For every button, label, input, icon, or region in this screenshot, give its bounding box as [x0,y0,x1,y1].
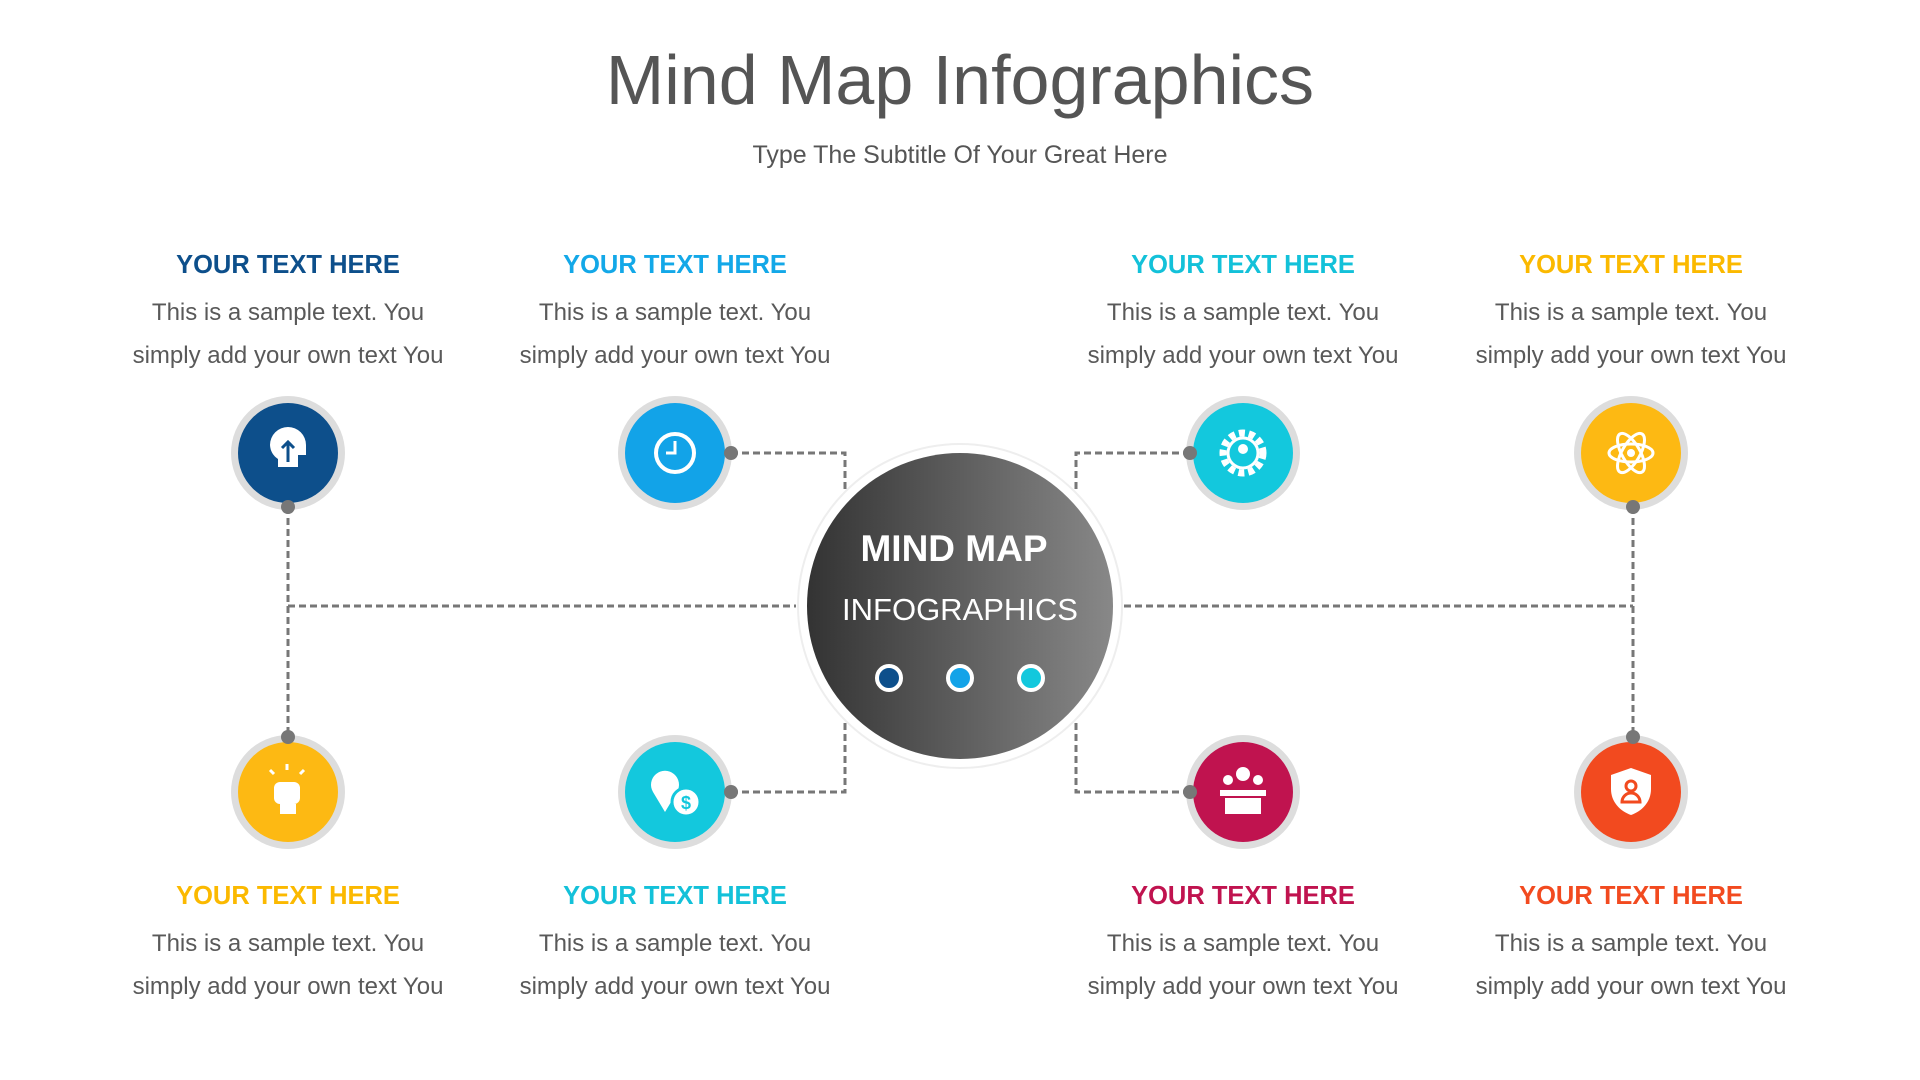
icon: gear [1186,396,1300,510]
text: top 2: This is a sample text. You [539,299,811,326]
text: bottom 2: simply add your own text You [520,973,830,1000]
text: bottom 1 [133,882,443,1000]
text: top 1: simply add your own text You [133,342,443,369]
text: bottom 3 [1088,882,1398,1000]
text: top 4 [1476,251,1786,369]
icon: meeting [1186,735,1300,849]
text: bottom 1: simply add your own text You [133,973,443,1000]
text: bottom 2: YOUR TEXT HERE [563,882,787,910]
icon: brain [231,396,345,510]
text: bottom 4: YOUR TEXT HERE [1519,882,1743,910]
text: bottom 1: YOUR TEXT HERE [176,882,400,910]
text: top 2 [520,251,830,369]
text: bottom 4 [1476,882,1786,1000]
text: top 1 [133,251,443,369]
central circle: INFOGRAPHICS [842,592,1078,627]
text: top 3: simply add your own text You [1088,342,1398,369]
icon: fist [231,735,345,849]
title: Mind Map Infographics [606,41,1314,119]
text: bottom 3: YOUR TEXT HERE [1131,882,1355,910]
subtitle: Type The Subtitle Of Your Great Here [752,141,1168,169]
central circle [797,443,1123,769]
text: top 1: This is a sample text. You [152,299,424,326]
central circle: MIND MAP [860,528,1048,569]
text: bottom 4: simply add your own text You [1476,973,1786,1000]
text: top 2: simply add your own text You [520,342,830,369]
text: top 3: This is a sample text. You [1107,299,1379,326]
text: bottom 3: This is a sample text. You [1107,930,1379,957]
text: top 4: This is a sample text. You [1495,299,1767,326]
text: bottom 4: This is a sample text. You [1495,930,1767,957]
icon: money pin: $ [681,793,691,813]
text: bottom 2 [520,882,830,1000]
text: top 3: YOUR TEXT HERE [1131,251,1355,279]
icon: shield [1574,735,1688,849]
text: top 2: YOUR TEXT HERE [563,251,787,279]
text: bottom 2: This is a sample text. You [539,930,811,957]
icon: clock [618,396,732,510]
text: bottom 1: This is a sample text. You [152,930,424,957]
icon: money pin [618,735,732,849]
text: top 1: YOUR TEXT HERE [176,251,400,279]
text: top 4: YOUR TEXT HERE [1519,251,1743,279]
text: bottom 3: simply add your own text You [1088,973,1398,1000]
icon: atom [1574,396,1688,510]
text: top 4: simply add your own text You [1476,342,1786,369]
text: top 3 [1088,251,1398,369]
